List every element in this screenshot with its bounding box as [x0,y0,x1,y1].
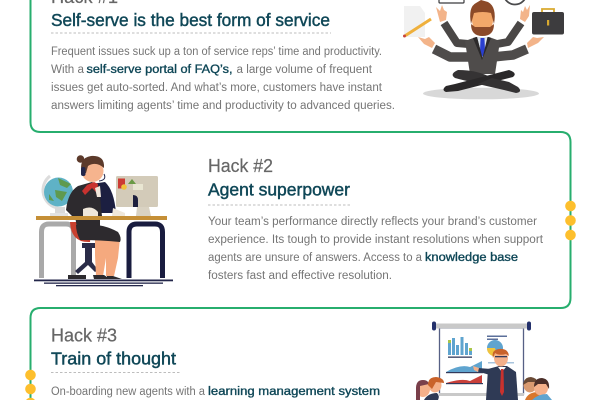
panel: hack 1 [51,0,564,112]
hack 3 body text: On-boarding new agents with a [51,386,206,398]
panel: hack 2 [34,155,576,286]
panel: hack 3 [25,322,552,400]
hack 1 body text: issues get auto-sorted. And what’s more, customers have instant [51,82,383,94]
hack 1 body text: a large volume of frequent [236,64,373,76]
right connector dots [565,201,576,240]
hack 1 body text: With a [51,64,85,76]
hack 1 body text: Frequent issues suck up a ton of service reps’ time and productivity. [51,46,382,58]
hack 1 body text: self-serve portal of FAQ’s, [86,64,232,76]
left connector dots [25,370,36,400]
hack 2 body text: knowledge base [425,252,518,264]
hack 2 label: Hack #2 [208,156,273,176]
hack 2 body text [208,216,544,282]
hack 2 body text: agents are unsure of answers. Access to a [208,252,423,264]
hack 2 heading: Agent superpower [208,180,350,200]
hack 2 body text: experience. Its tough to provide instant resolutions when support [208,234,544,246]
icon: presenter with chart screen [416,322,552,400]
hack 2 body text: fosters fast and effective resolution. [208,270,392,282]
hack 3 heading: Train of thought [51,348,176,368]
icon: support agent at desk [34,155,173,286]
hack 2 body text: Your team’s performance directly reflects your brand’s customer [208,216,537,228]
hack 3 body text [51,386,380,398]
hack 1 body text: answers limiting agents’ time and productivity to advanced queries. [51,100,395,112]
hack 1 heading: Self-serve is the best form of service [51,10,330,30]
hack 1 body text [51,46,395,112]
hack 3 label: Hack #3 [51,326,117,346]
hack 3 body text: learning management system [208,386,380,398]
icon: meditating multitasking businessman [403,0,564,99]
